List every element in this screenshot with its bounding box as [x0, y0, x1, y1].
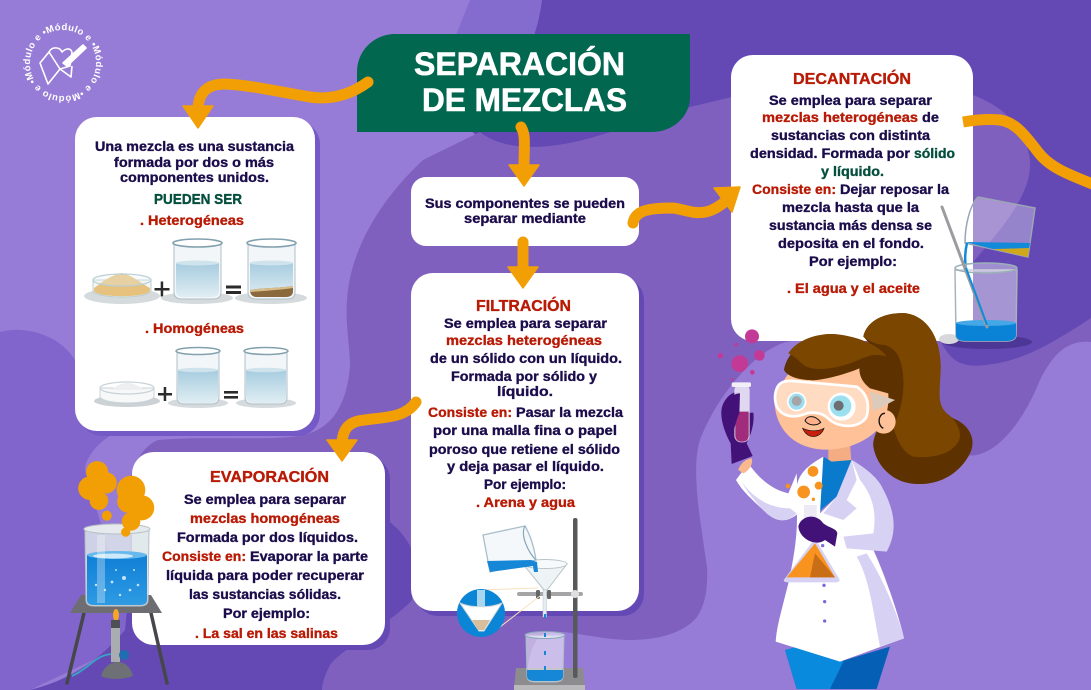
logo: Módulo e: Módulo e • — [23, 30, 46, 80]
panel: filtración: de un sólido con un líquido. — [430, 351, 622, 366]
panel: evaporación: líquida para poder recuperar — [166, 568, 365, 583]
icon: sal + agua = mezcla homogénea — [94, 348, 296, 408]
title banner: DE MEZCLAS — [422, 82, 627, 118]
panel: evaporación: mezclas homogéneas — [190, 511, 340, 526]
arrow: componentes a decantación — [633, 187, 740, 223]
panel: filtración: y deja pasar el líquido. — [447, 459, 604, 474]
panel: filtración: líquido. — [497, 384, 553, 399]
arrow: título a componentes — [509, 127, 539, 186]
panel: componentes — [411, 177, 639, 246]
illustration: montaje de decantación — [939, 197, 1035, 349]
panel: evaporación: las sustancias sólidas. — [189, 587, 341, 602]
panel: definición de mezcla: PUEDEN SER — [154, 192, 242, 208]
arrow: componentes a filtración — [508, 242, 538, 288]
panel: definición de mezcla: Una mezcla es una sustancia — [95, 139, 295, 154]
panel: decantación: Dejar reposar la — [840, 182, 950, 197]
panel: definición de mezcla: . Homogéneas — [145, 321, 244, 336]
panel: decantación: densidad. Formada por — [750, 146, 911, 161]
panel: filtración: Pasar la mezcla — [516, 405, 624, 420]
arrow: título a definición — [183, 82, 368, 128]
panel: decantación: . El agua y el aceite — [787, 281, 921, 296]
title banner — [357, 34, 690, 132]
icon: matraz y mano — [784, 505, 840, 582]
illustration: montaje de evaporación — [67, 461, 167, 683]
panel: decantación: mezclas heterogéneas — [762, 110, 918, 125]
panel: filtración — [411, 273, 644, 616]
panel: componentes: Sus componentes se pueden — [425, 196, 625, 211]
panel: evaporación: Formada por dos líquidos. — [177, 530, 358, 545]
panel: decantación: DECANTACIÓN — [793, 70, 911, 88]
panel: decantación: deposita en el fondo. — [778, 236, 924, 251]
panel: decantación — [731, 55, 973, 341]
panel: decantación: mezcla hasta que la — [782, 200, 920, 215]
icon: burbujas naranjas — [786, 466, 823, 501]
title banner: SEPARACIÓN — [414, 46, 625, 82]
illustration: montaje de filtración — [457, 518, 585, 690]
arrow: filtración a evaporación — [327, 402, 416, 461]
logo: Módulo e: Módulo e • — [30, 80, 80, 103]
panel: decantación: y líquido. — [821, 164, 884, 179]
logo: Módulo e — [23, 23, 103, 103]
icon: detalle del filtro — [457, 589, 505, 637]
panel: evaporación: . La sal en las salinas — [195, 626, 338, 641]
panel: componentes: separar mediante — [464, 211, 587, 226]
icon: arena + agua = mezcla heterogénea — [84, 239, 307, 304]
panel: evaporación: Evaporar la parte — [250, 549, 369, 564]
panel: definición de mezcla: componentes unidos. — [120, 170, 269, 185]
icon: vapor — [78, 461, 154, 537]
arrow: decantación hacia la derecha — [963, 120, 1091, 185]
panel: filtración: poroso que retiene el sólido — [429, 442, 620, 457]
panel: definición de mezcla: formada por dos o más — [114, 155, 274, 170]
panel: decantación: sustancia más densa se — [769, 218, 933, 233]
icon: cuello y ropa — [785, 443, 890, 689]
panel: filtración: FILTRACIÓN — [476, 297, 571, 315]
icon: mano y tubo de ensayo — [721, 382, 754, 473]
icon: coleta — [863, 313, 973, 484]
icon: cara — [775, 334, 896, 450]
panel: filtración: mezclas heterogéneas — [446, 333, 602, 348]
logo: Módulo e: Módulo e • — [46, 23, 96, 46]
panel: decantación: Consiste en: — [752, 182, 836, 197]
icon: burbujas rosas — [718, 329, 765, 381]
panel: evaporación: Por ejemplo: — [223, 606, 310, 621]
panel: decantación: Por ejemplo: — [809, 254, 897, 269]
panel: decantación: Se emplea para separar — [769, 93, 933, 108]
panel: evaporación: Se emplea para separar — [184, 492, 347, 507]
panel: filtración: Formada por sólido y — [451, 369, 598, 384]
panel: evaporación: EVAPORACIÓN — [210, 468, 329, 486]
panel: filtración: . Arena y agua — [476, 495, 576, 510]
logo: Módulo e: Módulo e • — [80, 46, 103, 96]
panel: decantación: sólido — [914, 146, 955, 161]
panel: evaporación — [132, 452, 390, 650]
panel: definición de mezcla: . Heterogéneas — [140, 213, 244, 228]
panel: definición de mezcla — [75, 117, 320, 436]
panel: filtración: Consiste en: — [428, 405, 512, 420]
panel: filtración: Se emplea para separar — [444, 316, 608, 331]
illustration: científica — [718, 313, 973, 689]
panel: decantación: de — [922, 110, 940, 125]
panel: filtración: Por ejemplo: — [484, 477, 566, 492]
panel: evaporación: Consiste en: — [162, 549, 246, 564]
panel: decantación: sustancias con distinta — [771, 128, 931, 143]
panel: filtración: por una malla fina o papel — [433, 423, 617, 438]
icon: bata — [736, 457, 904, 662]
